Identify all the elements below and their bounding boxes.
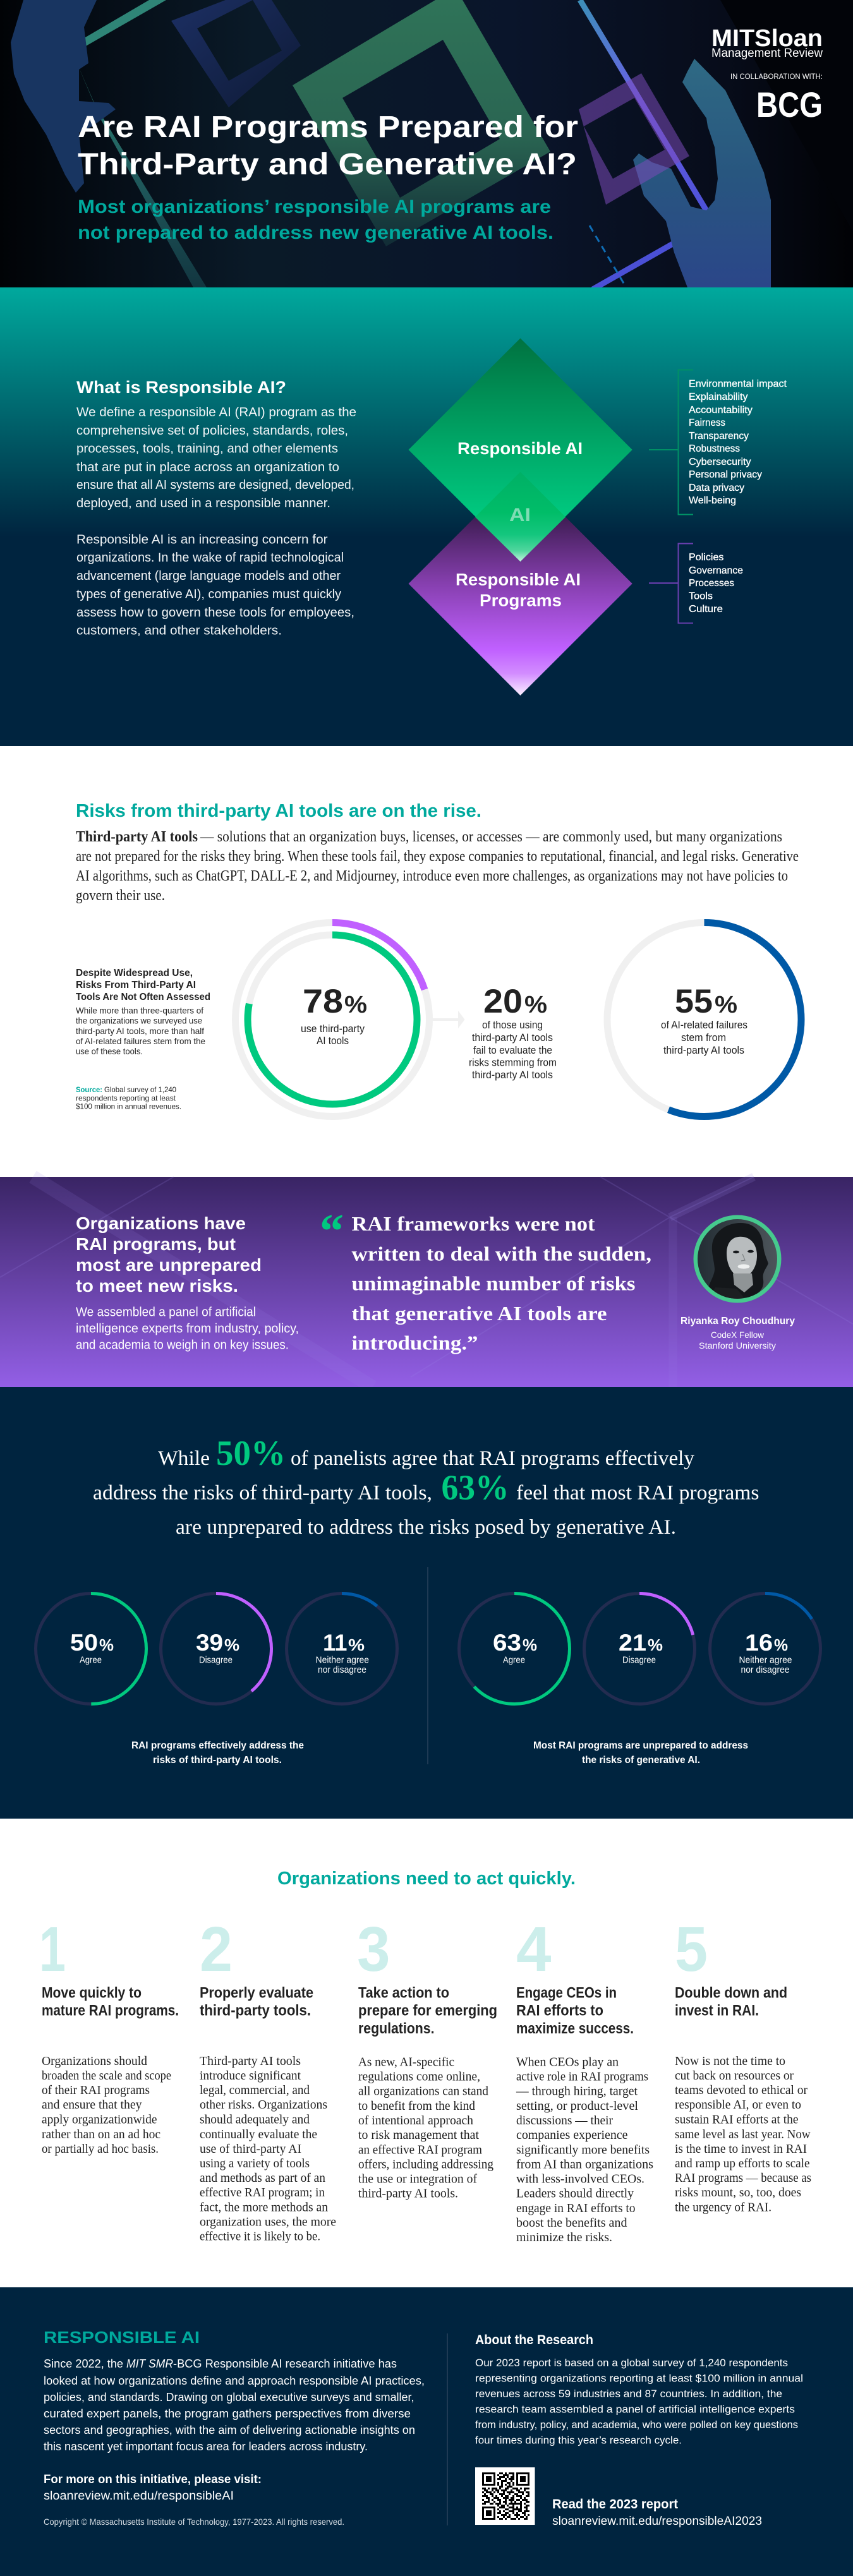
arrow [433,1014,463,1025]
title: Are RAI Programs Prepared for [78,111,578,144]
sidebar: chart description: of AI-related failures stem from the [76,1036,205,1046]
hero shape: teal strip lower [78,66,207,287]
divider [427,1567,428,1764]
donut: 11% neither: Neither agree [316,1655,369,1665]
sidebar: chart description: third-party AI tools, more than half [76,1026,204,1036]
list: program elements: Culture [689,604,723,615]
action 3: 3 [357,1914,390,1985]
concern paragraph: types of generative AI), companies must quickly [76,587,341,601]
title: Third-Party and Generative AI? [78,148,577,181]
action 4: — through hiring, target [516,2085,638,2098]
list: responsible AI dimensions: Well-being [689,495,736,506]
subtitle: not prepared to address new generative AI tools. [78,222,554,243]
sidebar: chart description: the organizations we surveyed use [76,1016,202,1026]
action 4: RAI efforts to [516,2002,603,2019]
action 2: legal, commercial, and [200,2083,310,2097]
action 5: 5 [675,1914,708,1985]
stat: 78% [301,983,367,1047]
stat: 20%: risks stemming from [469,1056,557,1069]
list: responsible AI dimensions: Personal privacy [689,469,762,480]
action 2: fact, the more methods an [200,2201,328,2215]
action 5: RAI programs — because as [675,2171,811,2185]
banner heading: to meet new risks. [76,1276,238,1296]
diamond: responsible AI programs [408,472,632,695]
action 5: invest in RAI. [675,2002,759,2019]
banner body [76,1305,299,1352]
footer background [0,2287,853,2576]
banner heading: most are unprepared [76,1255,262,1275]
research description: from industry, policy, and academia, who were polled on key questions [475,2419,798,2431]
sidebar: source: Global survey of 1,240 [104,1085,176,1094]
banner decoration [0,1177,853,1387]
action 5: Double down and [675,1985,787,2001]
panel: footer [0,2287,853,2576]
list: program elements [689,552,743,615]
heading: Organizations need to act quickly. [277,1869,576,1889]
report link: sloanreview.mit.edu/responsibleAI2023 [552,2515,762,2528]
action 3: of intentional approach [358,2114,473,2128]
action 1: mature RAI programs. [42,2002,179,2019]
action 3 [357,1914,497,2201]
stat: 20%: % [524,992,547,1018]
panel: third-party risks [0,746,853,1177]
action 3: Take action to [358,1985,449,2001]
action 3: prepare for emerging [358,2002,497,2019]
report link [552,2497,762,2528]
chart: nested rings 78% and 20% [235,922,430,1117]
donut: 21% disagree [584,1593,695,1704]
donut: 11% neither: % [348,1635,365,1654]
donut: 11% neither: nor disagree [318,1665,366,1675]
stat: 20% [469,983,557,1081]
caption: right donuts: the risks of generative AI. [582,1755,700,1766]
action 3: regulations come online, [358,2069,480,2083]
action 2: effective RAI program; in [200,2186,325,2200]
donut: 11% neither: 11 [323,1630,348,1656]
action 2: other risks. Organizations [200,2098,327,2112]
action 1: rather than on an ad hoc [42,2128,160,2141]
stat: 20%: 20 [483,983,523,1020]
summary statement: feel that most RAI programs [516,1482,759,1505]
action 4: companies experience [516,2128,628,2142]
title [78,111,578,181]
action 4: active role in RAI programs [516,2069,648,2083]
hero shape: teal strip upper [76,0,166,52]
sidebar: source [76,1085,181,1110]
action 1: apply organizationwide [42,2112,157,2126]
initiative link: For more on this initiative, please visit: [44,2473,262,2486]
sidebar: chart title [76,968,210,1002]
diamond overlap [475,472,566,562]
sidebar: chart description: While more than three-quarters of [76,1006,203,1016]
heading: Risks from third-party AI tools are on the rise. [76,801,481,821]
caption: right donuts: Most RAI programs are unprepared to address [533,1740,748,1751]
banner heading: RAI programs, but [76,1234,236,1254]
action 3: As new, AI-specific [358,2055,454,2069]
stat: 78%: use third-party [301,1023,365,1035]
donut: 63% agree: % [523,1635,537,1654]
sidebar: chart title: Tools Are Not Often Assessed [76,992,210,1002]
donut: 39% disagree: % [224,1635,239,1654]
stat: 55% [661,983,747,1056]
action 2: continually evaluate the [200,2128,317,2141]
list: program elements: Tools [689,591,713,601]
panel: act quickly [0,1819,853,2287]
action 5: same level as last year. Now [675,2128,811,2141]
banner heading: Organizations have [76,1213,246,1233]
action 3: an effective RAI program [358,2143,482,2157]
sidebar: chart title: Risks From Third-Party AI [76,980,196,990]
action 5: the urgency of RAI. [675,2201,771,2215]
action 5: teams devoted to ethical or [675,2083,808,2097]
caption: left donuts: RAI programs effectively address the [131,1740,304,1751]
donut: 39% disagree: Disagree [199,1655,233,1665]
summary statement [93,1434,759,1539]
stat: 20%: of those using [482,1019,543,1031]
intro paragraph: Third-party AI tools [76,829,198,845]
diagram: overlapping diamonds [408,339,632,695]
donut: 21% disagree: % [648,1635,663,1654]
donut: 16% neither: nor disagree [741,1665,790,1675]
donut: 11% neither [287,1593,397,1704]
section background [0,746,853,1177]
action 4: Engage CEOs in [516,1985,617,2001]
definition paragraph: processes, tools, training, and other elements [76,442,338,456]
stat: 78%: 78 [303,983,343,1020]
donut: 16% neither: % [774,1635,788,1654]
sidebar: source: Source: [76,1085,102,1094]
action 4: 4 [516,1914,552,1985]
donut: 63% agree: 63 [493,1630,521,1656]
action 4: minimize the risks. [516,2230,612,2244]
initiative link: sloanreview.mit.edu/responsibleAI [44,2489,234,2503]
research description [475,2357,803,2446]
action 4: with less-involved CEOs. [516,2172,644,2186]
action 5: Now is not the time to [675,2054,785,2068]
quote [351,1212,651,1354]
caption: right donuts [533,1740,748,1766]
logo: MIT Sloan Management Review: MITSloan [711,25,823,52]
action 2: effective it is likely to be. [200,2230,320,2244]
stat: 78%: % [344,992,367,1018]
collaboration label: IN COLLABORATION WITH: [730,73,823,81]
donut: 16% neither [710,1593,820,1704]
heading: What is Responsible AI? [76,378,286,397]
action 1: and ensure that they [42,2098,142,2112]
donut: 21% disagree: 21 [619,1630,646,1656]
action 2: using a variety of tools [200,2157,310,2170]
list: responsible AI dimensions: Accountability [689,405,753,416]
donut: 21% disagree: Disagree [622,1655,656,1665]
list: program elements: Governance [689,565,743,576]
list: responsible AI dimensions: Transparency [689,431,749,442]
action 5: risks mount, so, too, does [675,2186,801,2200]
initiative description: sectors and geographies, with the aim of delivering actionable insights on [44,2424,415,2436]
action 4 [516,1914,653,2244]
subtitle [78,196,554,243]
caption: left donuts [131,1740,304,1766]
action 2: Properly evaluate [200,1985,313,2001]
action 4: engage in RAI efforts to [516,2201,636,2215]
donut: 50% agree: Agree [80,1655,102,1665]
attribution: Stanford University [699,1340,776,1351]
action 5: is the time to invest in RAI [675,2142,807,2156]
attribution: CodeX Fellow [711,1330,765,1340]
research heading: About the Research [475,2333,593,2347]
banner heading [76,1213,262,1296]
donut: 39% disagree: 39 [196,1630,223,1656]
stat: 55%: 55 [675,983,713,1020]
action 3: to risk management that [358,2128,479,2142]
panel: what is responsible AI [0,287,853,746]
summary statement: are unprepared to address the risks posed by generative AI. [176,1516,676,1539]
definition paragraph: ensure that all AI systems are designed, developed, [76,478,354,492]
list: responsible AI dimensions [689,379,787,506]
action 1: broaden the scale and scope [42,2069,171,2083]
initiative description: MIT SMR [126,2357,173,2370]
list: responsible AI dimensions: Fairness [689,418,725,428]
action 4: boost the benefits and [516,2216,627,2230]
initiative description: curated expert panels, the program gathers perspectives from diverse [44,2407,411,2420]
portrait [695,1216,780,1302]
action 4: Leaders should directly [516,2187,634,2201]
sidebar: chart description [76,1006,205,1056]
stat: 20%: fail to evaluate the [473,1044,552,1056]
hero shape: green frame [293,0,550,246]
action 4: significantly more benefits [516,2143,650,2157]
hero shape: violet frame [579,73,689,205]
donut: 50% agree [35,1593,147,1704]
panel: panelist results [0,1387,853,1819]
donut: 63% agree: Agree [503,1655,525,1665]
initiative description: this nascent yet important focus area for leaders across industry. [44,2440,368,2453]
label: AI: AI [509,505,531,526]
concern paragraph: Responsible AI is an increasing concern for [76,533,328,547]
initiative description [44,2357,425,2453]
label: responsible AI programs: Responsible AI [456,570,581,589]
concern paragraph [76,533,354,638]
initiative description: Since 2022, the [44,2357,123,2370]
list: responsible AI dimensions: Environmental impact [689,379,787,389]
stat: 55%: stem from [681,1032,726,1044]
bracket: responsible AI [649,370,693,514]
research description: Our 2023 report is based on a global survey of 1,240 respondents [475,2357,788,2369]
initiative description: looked at how organizations define and approach responsible AI practices, [44,2374,425,2387]
copyright: Copyright © Massachusetts Institute of Technology, 1977-2023. All rights reserved. [44,2517,344,2527]
logo: BCG: BCG [756,85,823,124]
stat: 55%: % [715,992,737,1018]
action 4: setting, or product-level [516,2099,638,2113]
donut: 50% agree: 50 [70,1630,98,1656]
definition paragraph: comprehensive set of policies, standards, roles, [76,424,348,438]
attribution [681,1316,795,1351]
action 1: or partially ad hoc basis. [42,2142,159,2156]
research description: research team assembled a panel of artificial intelligence experts [475,2403,795,2416]
action 2: organization uses, the more [200,2215,336,2229]
donut: 16% neither: Neither agree [739,1655,792,1665]
action 3: the use or integration of [358,2172,477,2186]
initiative description: policies, and standards. Drawing on global executive surveys and smaller, [44,2391,414,2404]
caption: left donuts: risks of third-party AI tools. [153,1755,282,1766]
summary statement: of panelists agree that RAI programs effectively [291,1447,694,1470]
action 5: cut back on resources or [675,2069,794,2083]
quote mark: “ [320,1205,344,1258]
list: responsible AI dimensions: Cybersecurity [689,457,751,467]
panel: hero [0,0,853,289]
quote: unimaginable number of risks [351,1272,636,1295]
stat: 55%: of AI-related failures [661,1019,747,1031]
quote: that generative AI tools are [351,1302,607,1325]
intro paragraph: — solutions that an organization buys, licenses, or accesses — are commonly used, but many organizations [200,829,782,845]
list: responsible AI dimensions: Robustness [689,443,740,454]
banner background [0,1177,853,1387]
concern paragraph: customers, and other stakeholders. [76,624,282,638]
initiative description: -BCG Responsible AI research initiative has [173,2357,397,2370]
chart: ring 55% [607,922,801,1117]
action 1: Organizations should [42,2054,147,2068]
hero shape: left hand [11,0,116,193]
sidebar: chart description: use of these tools. [76,1046,143,1056]
list: responsible AI dimensions: Data privacy [689,483,744,493]
bracket: responsible AI programs [649,543,693,623]
definition paragraph: that are put in place across an organization to [76,460,339,474]
sidebar: chart title: Despite Widespread Use, [76,968,193,978]
action 2: use of third-party AI [200,2142,301,2156]
concern paragraph: advancement (large language models and other [76,569,341,583]
stat: 20%: third-party AI tools [472,1032,553,1044]
stat: 20%: third-party AI tools [472,1069,553,1081]
panel: quote banner [0,1177,853,1387]
action 2: and methods as part of an [200,2171,325,2185]
summary statement: address the risks of third-party AI tools, [93,1482,432,1505]
action 3: to benefit from the kind [358,2099,475,2113]
QR code [475,2467,535,2525]
summary statement: 63% [441,1468,509,1507]
donut: 16% neither: 16 [745,1630,773,1656]
hero shape: violet frame line [580,0,713,289]
initiative link [44,2473,262,2503]
donut: 63% agree [459,1593,570,1704]
report link: Read the 2023 report [552,2497,678,2512]
action 4: from AI than organizations [516,2158,653,2172]
initiative title: RESPONSIBLE AI [44,2328,200,2347]
list: responsible AI dimensions: Explainability [689,392,748,402]
action 1: 1 [39,1914,66,1985]
action 2 [200,1914,336,2244]
definition paragraph: deployed, and used in a responsible manner. [76,497,330,510]
subtitle: Most organizations’ responsible AI programs are [78,196,551,217]
action 2: Third-party AI tools [200,2054,301,2068]
label: responsible AI programs: Programs [480,591,562,610]
summary statement: 50% [216,1434,286,1473]
action 1 [39,1914,179,2156]
action 5: responsible AI, or even to [675,2098,801,2112]
research description: revenues across 59 industries and 87 countries. In addition, the [475,2388,782,2400]
hero shape: right hand [633,59,771,287]
summary statement: While [158,1447,210,1470]
list: program elements: Policies [689,552,724,563]
action 2: introduce significant [200,2069,301,2083]
section background [0,1387,853,1819]
action 5 [675,1914,811,2215]
attribution: Riyanka Roy Choudhury [681,1316,795,1327]
divider [447,2333,448,2525]
stat: 55%: third-party AI tools [663,1044,744,1056]
intro paragraph: govern their use. [76,888,165,904]
concern paragraph: assess how to govern these tools for employees, [76,606,354,620]
donut: 50% agree: % [99,1635,114,1654]
quote: introducing.” [351,1332,478,1354]
action 3: all organizations can stand [358,2085,488,2098]
banner body: intelligence experts from industry, policy, [76,1321,299,1335]
action 2: 2 [200,1914,233,1985]
label: responsible AI: Responsible AI [457,439,583,458]
action 1: of their RAI programs [42,2083,150,2097]
research description: representing organizations reporting at least $100 million in annual [475,2373,803,2384]
label: responsible AI programs [456,570,581,610]
research description: four times during this year’s research cycle. [475,2435,682,2446]
definition paragraph [76,406,356,510]
hero background [0,0,853,287]
hero shape: dashed line [590,226,626,287]
logo: MIT Sloan Management Review: Management Review [711,47,823,60]
hero dark corner [720,0,853,232]
action 2: should adequately and [200,2112,310,2126]
section background [0,287,853,746]
action 5: and ramp up efforts to scale [675,2157,810,2170]
banner body: and academia to weigh in on key issues. [76,1338,289,1352]
donut: 39% disagree [160,1593,272,1704]
action 5: sustain RAI efforts at the [675,2112,799,2126]
hero shape: blue frame [171,0,301,107]
action 4: discussions — their [516,2114,613,2128]
definition paragraph: We define a responsible AI (RAI) program as the [76,406,356,419]
diamond: responsible AI [408,339,632,562]
section background [0,1819,853,2287]
action 4: When CEOs play an [516,2055,619,2069]
stat: 78%: AI tools [317,1035,349,1047]
action 3: regulations. [358,2020,435,2037]
intro paragraph [76,829,799,904]
action 3: third-party AI tools. [358,2187,458,2201]
action 1: Move quickly to [42,1985,142,2001]
concern paragraph: organizations. In the wake of rapid technological [76,551,344,565]
quote: RAI frameworks were not [351,1212,595,1235]
sidebar: source: $100 million in annual revenues. [76,1102,181,1110]
quote: written to deal with the sudden, [351,1242,651,1265]
list: program elements: Processes [689,578,734,589]
action 3: offers, including addressing [358,2158,493,2172]
action 4: maximize success. [516,2020,634,2037]
sidebar: source: respondents reporting at least [76,1094,176,1103]
banner body: We assembled a panel of artificial [76,1305,256,1319]
action 2: third-party tools. [200,2002,311,2019]
